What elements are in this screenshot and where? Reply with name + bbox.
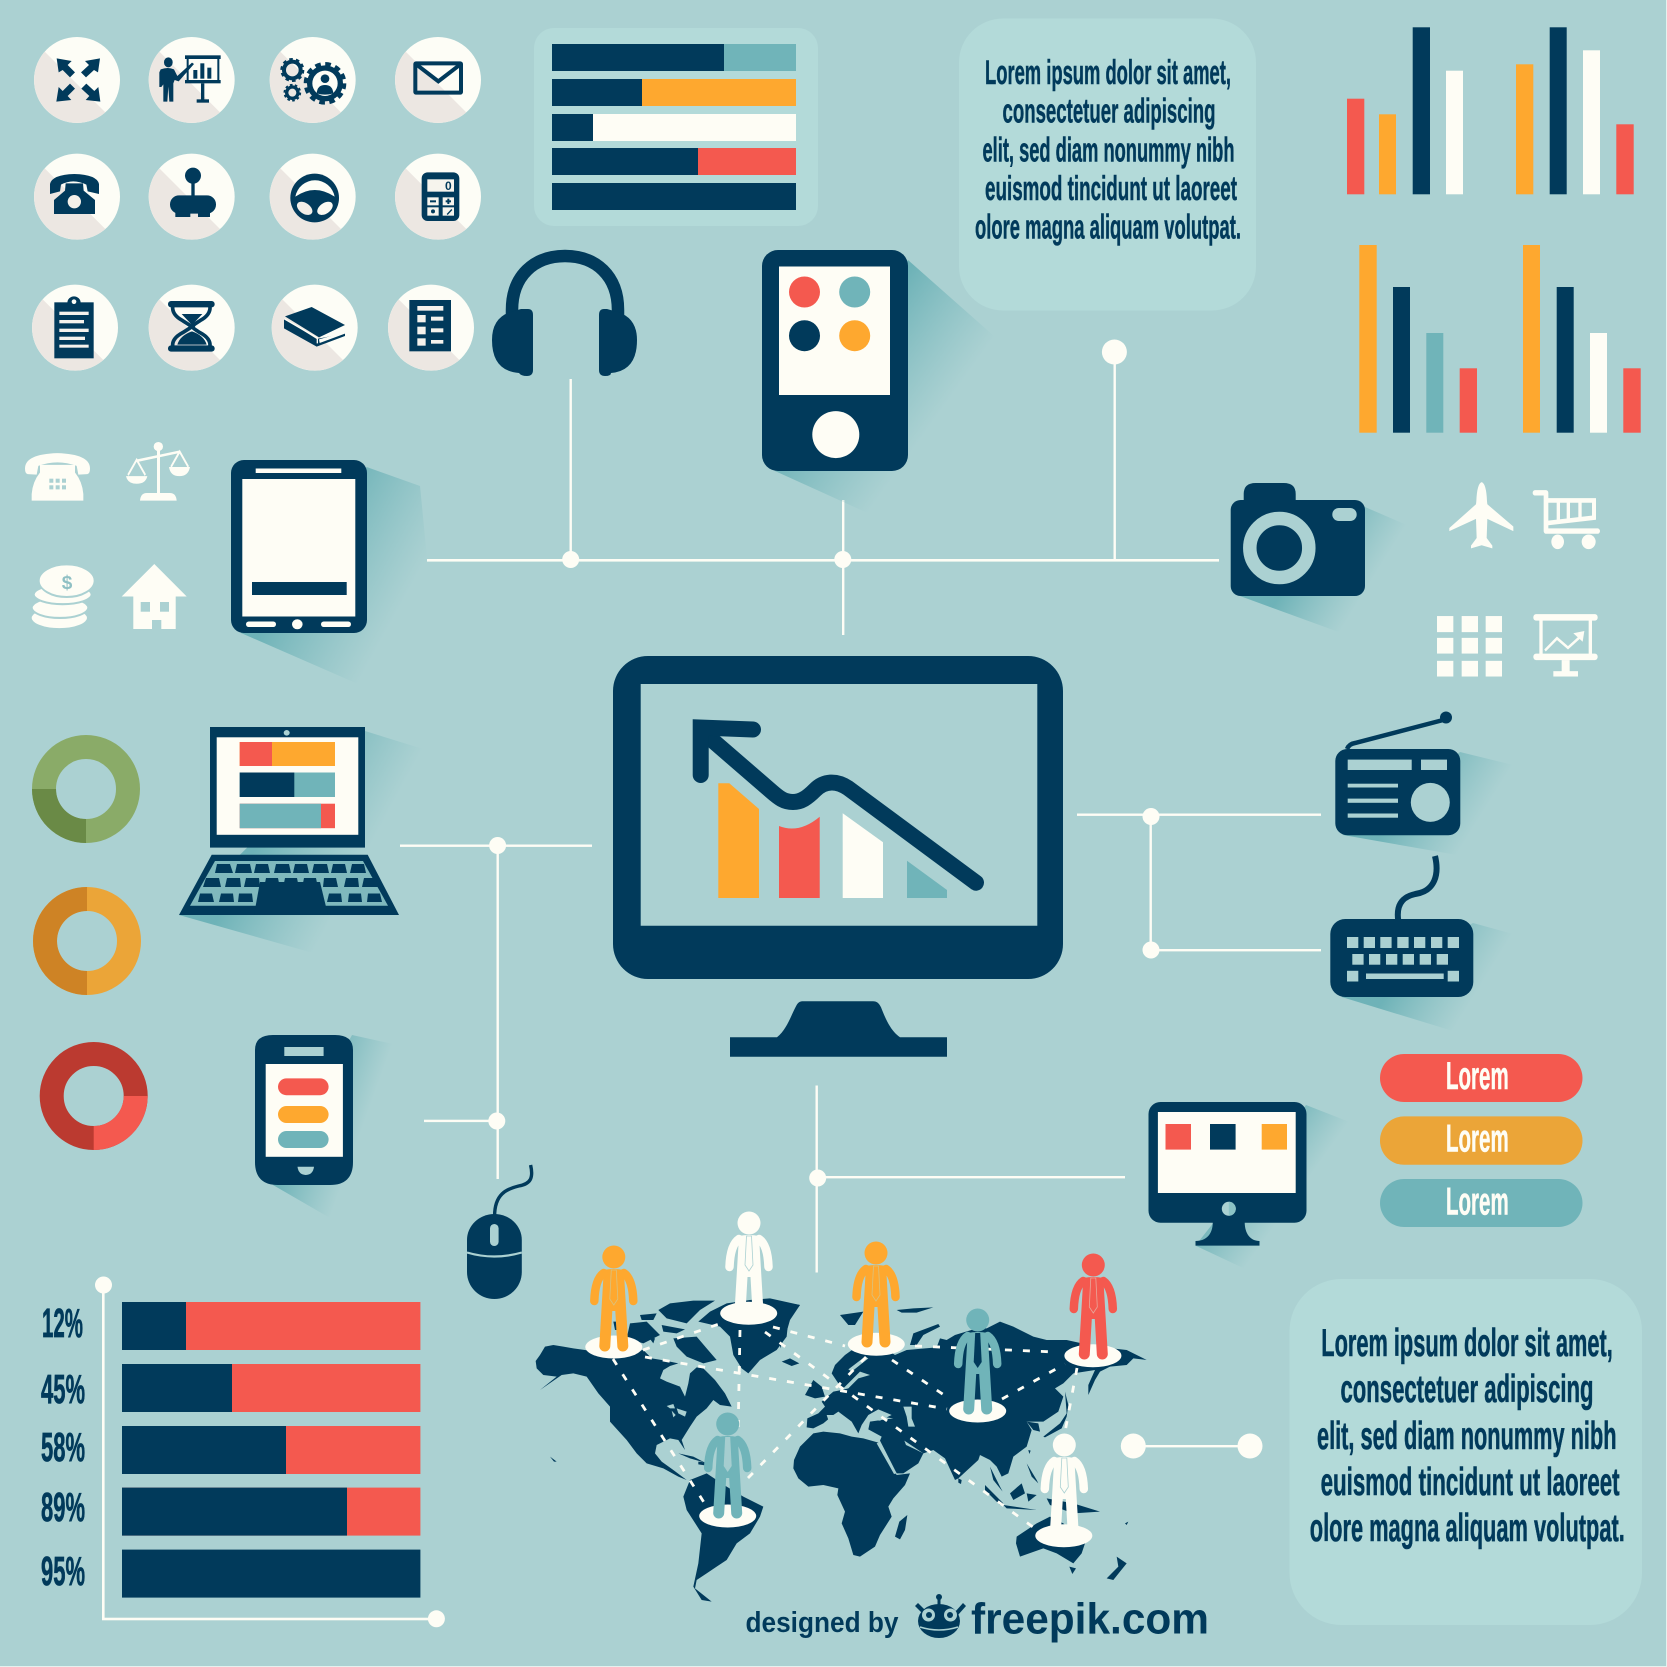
icon: grid [1437,616,1502,677]
panel: text bubble top: consectetuer adipiscing [1002,92,1216,130]
person: white australia [1045,1434,1084,1540]
icon: clipboard [32,285,118,371]
person: orange left [594,1246,633,1352]
icon: book [272,285,358,371]
panel: stacked bars [534,28,818,226]
icon: telephone [34,154,120,240]
chart percentage labels: 12% [42,1300,83,1346]
icon: shopping cart [1535,493,1598,549]
white icons left [25,442,190,629]
chart percentage labels: 89% [41,1484,85,1530]
icon: presenter [149,37,235,123]
chart axis [95,1276,445,1627]
icon: calculator [395,154,481,240]
icon: computer mouse [467,1165,532,1299]
map: location discs [585,1302,1121,1547]
shadow: small phone [273,1035,393,1218]
map: dashed network links [613,1322,1077,1530]
shadow: laptop [179,731,423,953]
donut: orange [33,887,129,995]
monitor trend arrow [701,728,976,883]
bar chart: top right group 1 [1347,27,1463,194]
icon: headphones [492,256,637,376]
donut: red [52,1054,148,1150]
icon: laptop [179,727,399,915]
panel: text bubble top: olore magna aliquam volutpat. [975,208,1241,246]
legend pills: Lorem [1446,1180,1509,1223]
shadow: radio [1343,752,1513,855]
person: red [1074,1254,1113,1360]
percentage bar chart [41,1276,445,1627]
credit: designed by freepik.com: freepik.com [971,1594,1209,1644]
panel: text bubble top: Lorem ipsum dolor sit amet, [985,54,1231,92]
bar chart: top right group 2 [1516,27,1634,194]
person: white top [730,1212,768,1318]
world map [536,1298,1147,1602]
person: teal asia [958,1308,997,1414]
icon: coins [31,564,94,629]
icon: tablet [231,460,367,633]
connector: map to text bubble [1121,1434,1262,1458]
icon: media player [762,250,908,471]
coin dollar sign: $ [62,573,73,594]
legend pills: Lorem [1446,1055,1509,1098]
bar chart: top right group 3 [1359,245,1477,433]
icon: hourglass [149,285,235,371]
monitor bars [718,783,947,898]
icon: expand arrows [34,37,120,123]
shadow: small monitor [1196,1105,1350,1269]
person: orange centre [856,1242,896,1348]
chart percentage labels [41,1300,85,1594]
panel: text bubble bottom [1290,1279,1642,1625]
icon: joystick [149,154,235,240]
icon: freepik mascot [915,1594,966,1638]
monitor stand [730,1001,947,1057]
shadow: tablet [241,467,427,684]
icon: presentation board [1533,614,1598,677]
map: americas and greenland [536,1298,800,1602]
circular icon set [32,37,481,371]
icon: gears with person [270,37,356,123]
shadow: keyboard [1342,923,1513,1031]
icon: keyboard [1330,856,1473,997]
icon: envelope [395,37,481,123]
icon: calculator: 0 [445,179,452,193]
legend pills [1380,1054,1582,1227]
bar chart: top right group 4 [1523,245,1641,433]
chart percentage labels: 95% [41,1548,85,1594]
connector lines: left network [400,837,592,1179]
panel: text bubble top: elit, sed diam nonummy nibh [982,132,1234,170]
panel: text bubble top [959,18,1256,310]
icon: white telephone [25,453,90,501]
icon: house [122,564,187,630]
shadow: camera [1240,507,1407,632]
icon: camera [1231,483,1365,596]
connector lines: right network [1077,808,1321,958]
donut: green [32,747,128,843]
icon: list document [388,285,474,371]
legend pills: Lorem [1446,1118,1509,1161]
icon: scales [126,442,190,501]
map: europe asia africa oceania [780,1302,1147,1580]
credit: designed by freepik.com [746,1594,1209,1644]
white icons right [1437,482,1598,677]
icon: airplane [1449,482,1513,548]
connector lines: top network [427,340,1219,635]
chart percentage labels: 45% [41,1366,85,1412]
icon: radio [1335,712,1460,835]
person: teal south america [708,1412,747,1518]
credit: designed by freepik.com: designed by [746,1607,898,1639]
chart percentage labels: 58% [41,1424,85,1470]
icon: smartphone [255,1035,353,1185]
connector lines: lower network [809,1086,1125,1272]
icon: steering wheel [270,154,356,240]
shadow: media player [775,260,1012,515]
panel: text bubble top: euismod tincidunt ut laoreet [985,170,1237,208]
icon: small monitor [1148,1102,1306,1246]
central monitor [613,656,1063,1057]
chart bars [122,1302,420,1598]
